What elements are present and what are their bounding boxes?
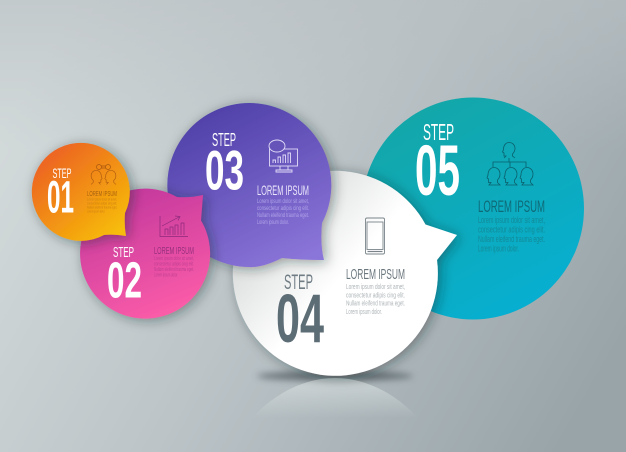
step 02 number: 02 (107, 252, 142, 308)
step 04 heading: LOREM IPSUM (346, 266, 405, 283)
step 02 body text: consectetur adipis cing elit. (154, 262, 194, 268)
step 05 number: 05 (415, 132, 460, 211)
step 03 body text: Lorem ipsum dolor. (257, 219, 289, 226)
icon: smartphone (366, 218, 384, 254)
step 04 body text: Lorem ipsum dolor sit amet, (346, 282, 405, 291)
panel: step 02 (80, 189, 210, 319)
step 01 label: STEP (52, 166, 72, 181)
step 04 body text: consectetur adipis cing elit. (346, 290, 405, 299)
panel: step 04 (233, 171, 457, 376)
step 05 body text: Lorem ipsum dolor. (478, 244, 519, 254)
step 05 body text: Nullam eleifend trauma eget. (478, 234, 545, 244)
step 02 body text: Lorem ipsum dolor. (154, 272, 178, 278)
step 02 body text: Lorem ipsum dolor sit amet, (154, 256, 194, 262)
step 03 body text: Nullam eleifend trauma eget. (257, 212, 309, 219)
step 01 body text: Nullam eleifend trauma eget. (87, 204, 117, 210)
step 01 heading: LOREM IPSUM (87, 189, 117, 198)
step 04 number: 04 (276, 280, 324, 357)
step 02 body text: Nullam eleifend trauma eget. (154, 267, 194, 273)
step 03 body text (257, 198, 309, 226)
step 03 label: STEP (212, 130, 236, 150)
step 04 body text (346, 282, 405, 316)
step 03 number: 03 (205, 138, 244, 202)
panel: step 03 (167, 103, 331, 267)
step 05 body text: consectetur adipis cing elit. (478, 224, 545, 234)
step 02 label: STEP (113, 244, 134, 261)
icon: two heads with gears (91, 164, 116, 184)
step 01 body text: Lorem ipsum dolor sit amet, (87, 196, 117, 202)
step 03 body text: consectetur adipis cing elit. (257, 205, 309, 212)
icon: growth bar chart (160, 216, 188, 236)
step 05 body text (478, 215, 545, 254)
step 04 body text: Nullam eleifend trauma eget. (346, 299, 405, 308)
step 02 heading: LOREM IPSUM (154, 245, 194, 257)
step 05 label: STEP (423, 119, 454, 145)
step 03 body text: Lorem ipsum dolor sit amet, (257, 198, 309, 205)
step 01 body text (87, 196, 117, 214)
step 05 body text: Lorem ipsum dolor sit amet, (478, 215, 545, 225)
step 03 heading: LOREM IPSUM (257, 182, 309, 198)
panel: step 01 (32, 143, 130, 241)
step 05 heading: LOREM IPSUM (478, 198, 545, 216)
icon: org chart heads (487, 142, 533, 185)
step 04 label: STEP (284, 271, 313, 294)
icon: monitor with chart (269, 140, 298, 172)
step 01 body text: consectetur adipis cing elit. (87, 200, 117, 206)
step 04 body text: Lorem ipsum dolor. (346, 307, 382, 316)
step 01 number: 01 (47, 172, 74, 222)
floor shadow and reflection (252, 371, 418, 418)
panel: step 05 (362, 98, 584, 320)
step 01 body text: Lorem ipsum dolor. (87, 208, 105, 214)
step 02 body text (154, 256, 194, 278)
